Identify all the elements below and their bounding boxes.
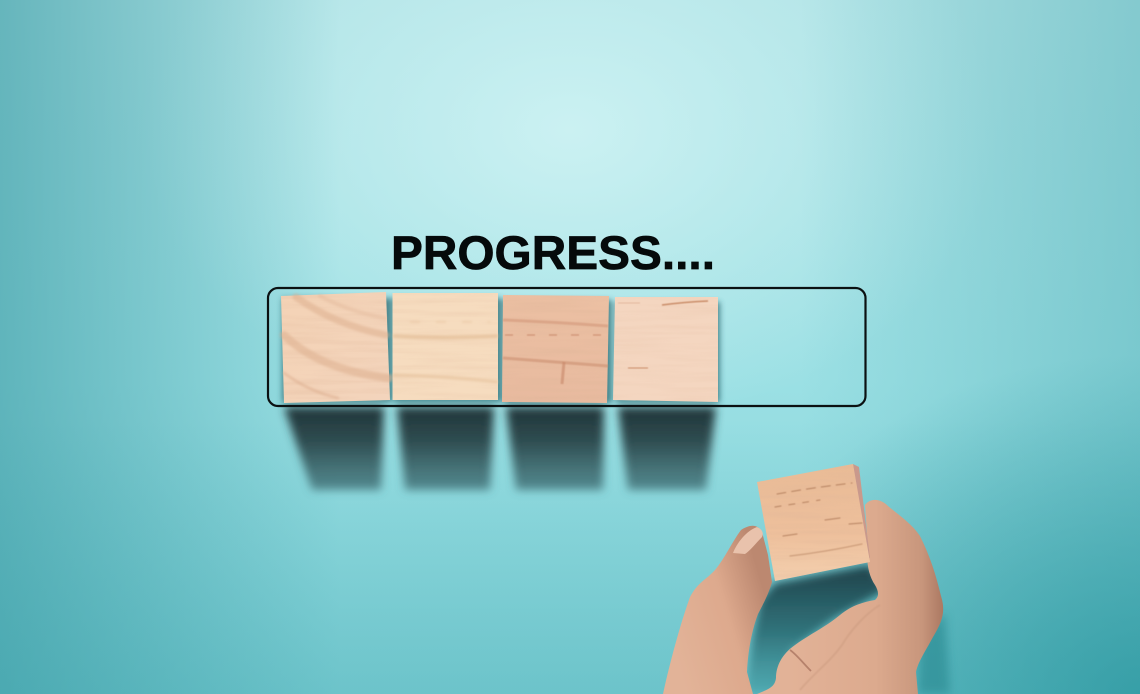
held wooden block side xyxy=(853,464,870,560)
block 2 xyxy=(392,293,498,400)
held wooden block xyxy=(757,464,870,581)
wooden blocks in bar xyxy=(281,292,718,403)
thumb xyxy=(663,526,772,694)
block 4 xyxy=(613,297,718,402)
hand holding block xyxy=(663,464,943,694)
block shadows xyxy=(284,407,716,490)
shadow of held block and hand xyxy=(745,565,950,694)
contact shadow behind blocks xyxy=(282,298,720,403)
block 1 xyxy=(281,292,390,403)
finger crease xyxy=(790,650,811,671)
fingers and palm xyxy=(757,500,943,694)
thumbnail xyxy=(733,527,763,554)
index finger highlight xyxy=(800,605,880,690)
block 3 xyxy=(502,295,609,403)
progress bar outline xyxy=(268,288,866,406)
heading: PROGRESS....: PROGRESS.... xyxy=(391,226,715,279)
wood grain xyxy=(775,483,862,556)
